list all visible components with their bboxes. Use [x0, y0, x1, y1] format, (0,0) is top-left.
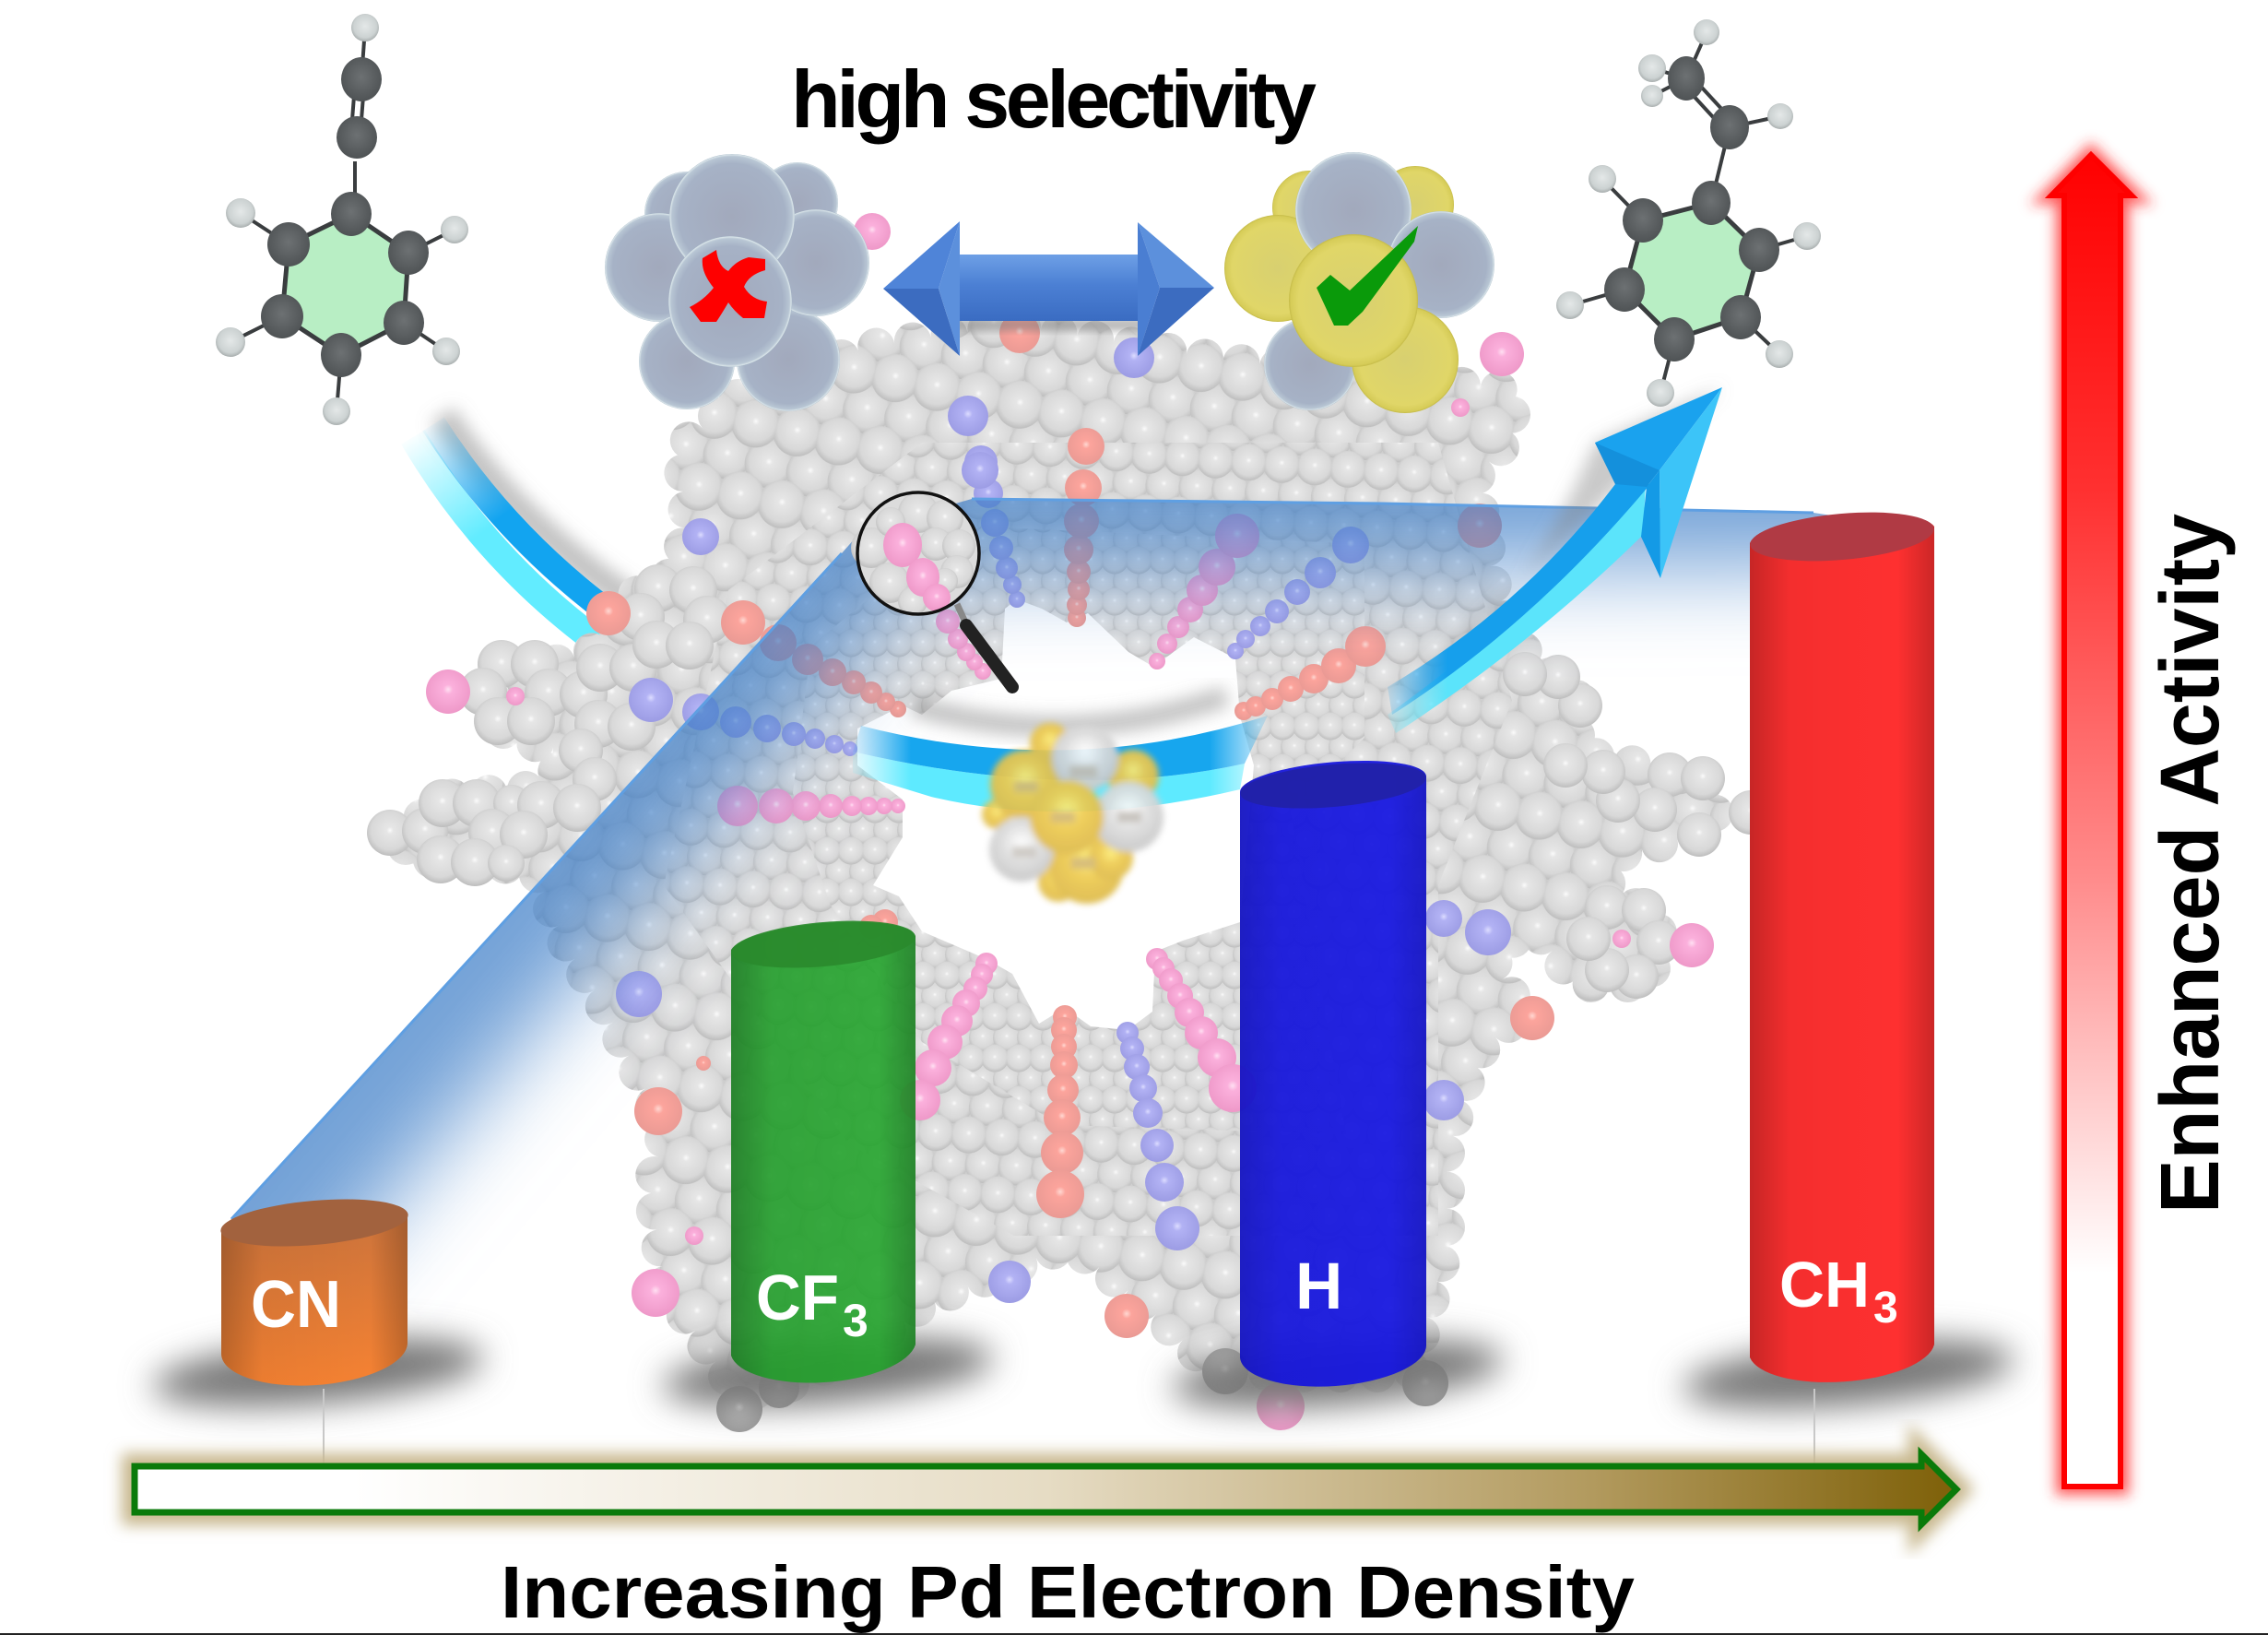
arrow: enhanced activity	[2051, 155, 2132, 1487]
icon: red cross	[690, 250, 767, 322]
title: high selectivity	[791, 53, 1317, 145]
dark lower atoms	[716, 1348, 1448, 1432]
cluster: rejected silver bubble cluster	[605, 154, 869, 411]
blue atoms	[616, 338, 1511, 1303]
arrow: increasing electron density	[135, 1454, 1956, 1524]
bar: CF3	[729, 914, 917, 1383]
arrow: pore curve band	[853, 696, 1268, 812]
bar: CN	[219, 1192, 410, 1386]
magnifying glass	[851, 492, 1012, 687]
framework: porous sphere lattice	[367, 213, 1750, 1432]
molecule: styrene	[1556, 19, 1821, 407]
bar: CF3: CF	[756, 1262, 839, 1333]
bar: H	[1238, 756, 1428, 1387]
leader line: CH3	[1813, 1389, 1815, 1466]
arrow: outgoing product curve	[1388, 387, 1722, 733]
red atoms	[586, 313, 1554, 1338]
lattice body	[390, 321, 1731, 1407]
bar: CH3	[1748, 505, 1936, 1382]
bar: CH3: CH	[1779, 1249, 1870, 1321]
icon: green check	[1317, 226, 1418, 326]
pink atoms	[426, 213, 1714, 1430]
bar: H: H	[1295, 1250, 1342, 1323]
blue projection plane	[230, 498, 1829, 1284]
Pd nanocluster	[982, 723, 1164, 904]
bottom edge line	[0, 1633, 2268, 1635]
axis label: enhanced activity: Enhanced Activity	[2144, 514, 2237, 1214]
arrow: blue double arrow	[883, 221, 1214, 356]
cluster: selected gold bubble cluster	[1224, 152, 1494, 413]
axis label: increasing Pd electron density: Increasing Pd Electron Density	[501, 1551, 1636, 1633]
leader line: CN	[323, 1389, 325, 1466]
arrow: incoming reactant curve	[413, 415, 636, 642]
outer grey atoms	[367, 564, 1773, 999]
molecule: phenylacetylene	[216, 14, 468, 425]
shadows under cylinders	[150, 1326, 2016, 1420]
bar: CN: CN	[251, 1268, 341, 1342]
bar: CF3: 3	[843, 1295, 868, 1346]
bar: CH3: 3	[1873, 1284, 1898, 1333]
